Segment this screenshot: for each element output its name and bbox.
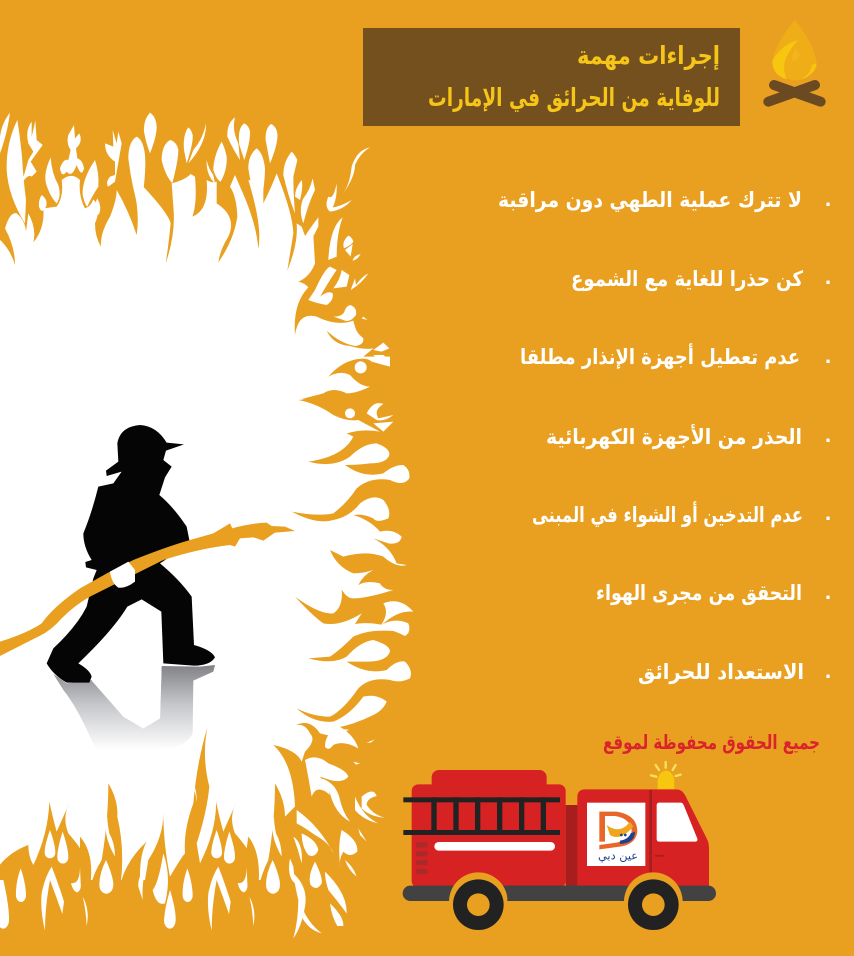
item 4: .: [825, 426, 831, 447]
white drops, repeated flame motif: [0, 725, 385, 938]
item 1: .: [825, 190, 831, 211]
glove: [110, 562, 135, 588]
item 2: .: [825, 268, 831, 289]
silhouette: [47, 425, 215, 683]
item 1: لا تترك عملية الطهي دون مراقبة: [498, 188, 802, 212]
warning light: [651, 762, 681, 790]
item 6: .: [825, 583, 831, 604]
right flames: [292, 397, 423, 732]
title line 1: إجراءات مهمة: [577, 41, 720, 71]
floor reflection: [53, 665, 215, 750]
item 3: عدم تعطيل أجهزة الإنذار مطلقا: [520, 342, 800, 369]
chassis: [403, 886, 716, 901]
logs: [768, 85, 821, 102]
white flame tongues, top edge: [0, 113, 390, 373]
fire truck: [403, 762, 716, 933]
white flame tongues, right edge: [345, 403, 413, 636]
item 3: .: [825, 347, 831, 368]
bullet list: [498, 188, 831, 684]
item 2: كن حذرا للغاية مع الشموع: [571, 267, 804, 291]
side stripe: [434, 842, 555, 851]
icon: campfire: [768, 20, 821, 102]
item 7: الاستعداد للحرائق: [638, 660, 804, 684]
front and rear wheels: [449, 872, 683, 933]
truck bed: [412, 770, 578, 888]
white tongues on the lower right mass: [297, 810, 333, 853]
firefighter with hose: [0, 425, 295, 750]
item 4: الحذر من الأجهزة الكهربائية: [546, 423, 802, 449]
title line 2: للوقاية من الحرائق في الإمارات: [428, 83, 720, 113]
illustration: white flame burst: [0, 98, 433, 956]
vents: [416, 842, 427, 874]
bottom flames: [0, 720, 433, 956]
ladder: [403, 797, 560, 835]
cab: [577, 789, 709, 887]
item 5: .: [825, 504, 831, 525]
logo panel: [587, 803, 645, 866]
item 6: التحقق من مجرى الهواء: [596, 581, 802, 605]
title panel: [363, 28, 740, 126]
logo panel: عين دبي: [598, 848, 638, 863]
item 7: .: [825, 662, 831, 683]
top flames: [0, 98, 423, 403]
hose and nozzle spray: [0, 523, 295, 656]
cab window: [657, 803, 697, 842]
